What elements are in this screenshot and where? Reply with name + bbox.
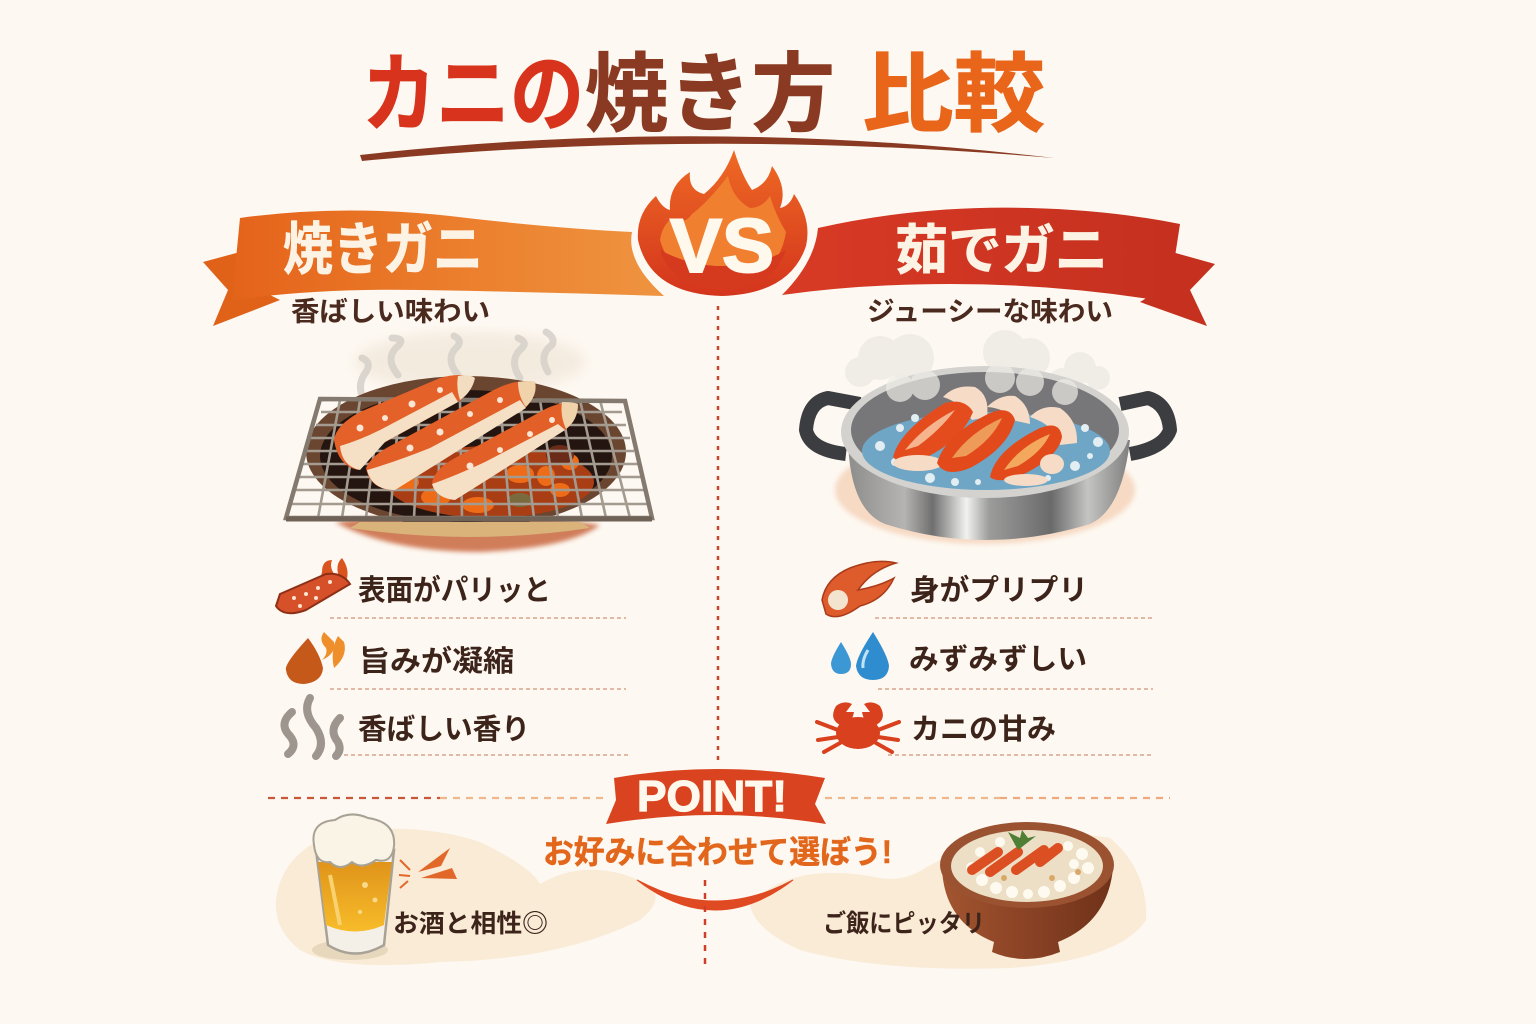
label: surface crisp: 表面がパリッと <box>358 573 551 607</box>
left subtitle: 香ばしい味わい <box>291 297 490 327</box>
crab meat 1 <box>893 386 988 471</box>
right ribbon: 茹でガニ: 茹でガニ <box>895 221 1108 281</box>
title <box>362 47 1045 143</box>
illustration: grilled crab on charcoal grill <box>286 332 652 552</box>
list: grilled crab features <box>276 558 628 756</box>
bottom divider <box>704 880 706 966</box>
label: juicy: みずみずしい <box>909 643 1087 676</box>
POINT banner <box>606 769 826 824</box>
icon: beer burst <box>399 848 457 888</box>
point message: お好みに合わせて選ぼう! <box>543 834 892 870</box>
crab meat 3 <box>990 407 1077 486</box>
steam <box>360 332 553 400</box>
point divider <box>268 797 1170 799</box>
label: sake pairing: お酒と相性◎ <box>393 910 548 938</box>
right subtitle: ジューシーな味わい <box>867 297 1113 327</box>
label: aroma: 香ばしい香り <box>358 713 530 746</box>
title: 比較 <box>862 47 1045 143</box>
pot body <box>848 440 1130 540</box>
title: 焼き方 <box>585 47 835 143</box>
right ribbon: 茹でガニ <box>782 208 1215 326</box>
background blobs <box>276 829 1146 969</box>
steam clouds <box>845 330 1110 396</box>
icon: smoke <box>284 698 340 756</box>
wire grid <box>290 400 648 518</box>
steam over pot <box>886 363 1078 405</box>
title: カニの <box>362 47 584 143</box>
POINT banner: POINT! <box>637 772 787 821</box>
left ribbon: 焼きガニ <box>203 210 664 326</box>
pot handles <box>806 398 860 454</box>
crab leg 1 <box>334 375 475 470</box>
crab leg 3 <box>432 402 578 500</box>
list: boiled crab features <box>817 561 1153 755</box>
label: plump: 身がプリプリ <box>910 573 1088 607</box>
icon: rice bowl <box>940 822 1114 959</box>
water <box>862 412 1110 490</box>
left ribbon: 焼きガニ: 焼きガニ <box>283 218 483 282</box>
crab leg 2 <box>366 381 536 490</box>
icon: crab <box>817 702 899 752</box>
label: umami: 旨みが凝縮 <box>359 644 514 678</box>
smile arc <box>637 880 793 910</box>
icon: water drops <box>831 632 889 680</box>
title underline <box>360 136 1054 161</box>
label: sweetness: カニの甘み <box>911 713 1056 746</box>
center dotted divider <box>717 306 719 762</box>
crab meat 2 <box>937 396 1030 472</box>
icon: umami drop <box>286 632 345 684</box>
illustration: boiled crab in pot <box>806 330 1170 544</box>
icon: beer glass <box>312 814 394 960</box>
icon: crab claw <box>822 561 896 617</box>
coals <box>391 445 579 513</box>
icon: crab leg with flame <box>276 558 350 613</box>
VS flame <box>638 150 808 296</box>
VS flame: VS <box>670 204 774 289</box>
label: rice pairing: ご飯にピッタリ <box>823 909 985 938</box>
